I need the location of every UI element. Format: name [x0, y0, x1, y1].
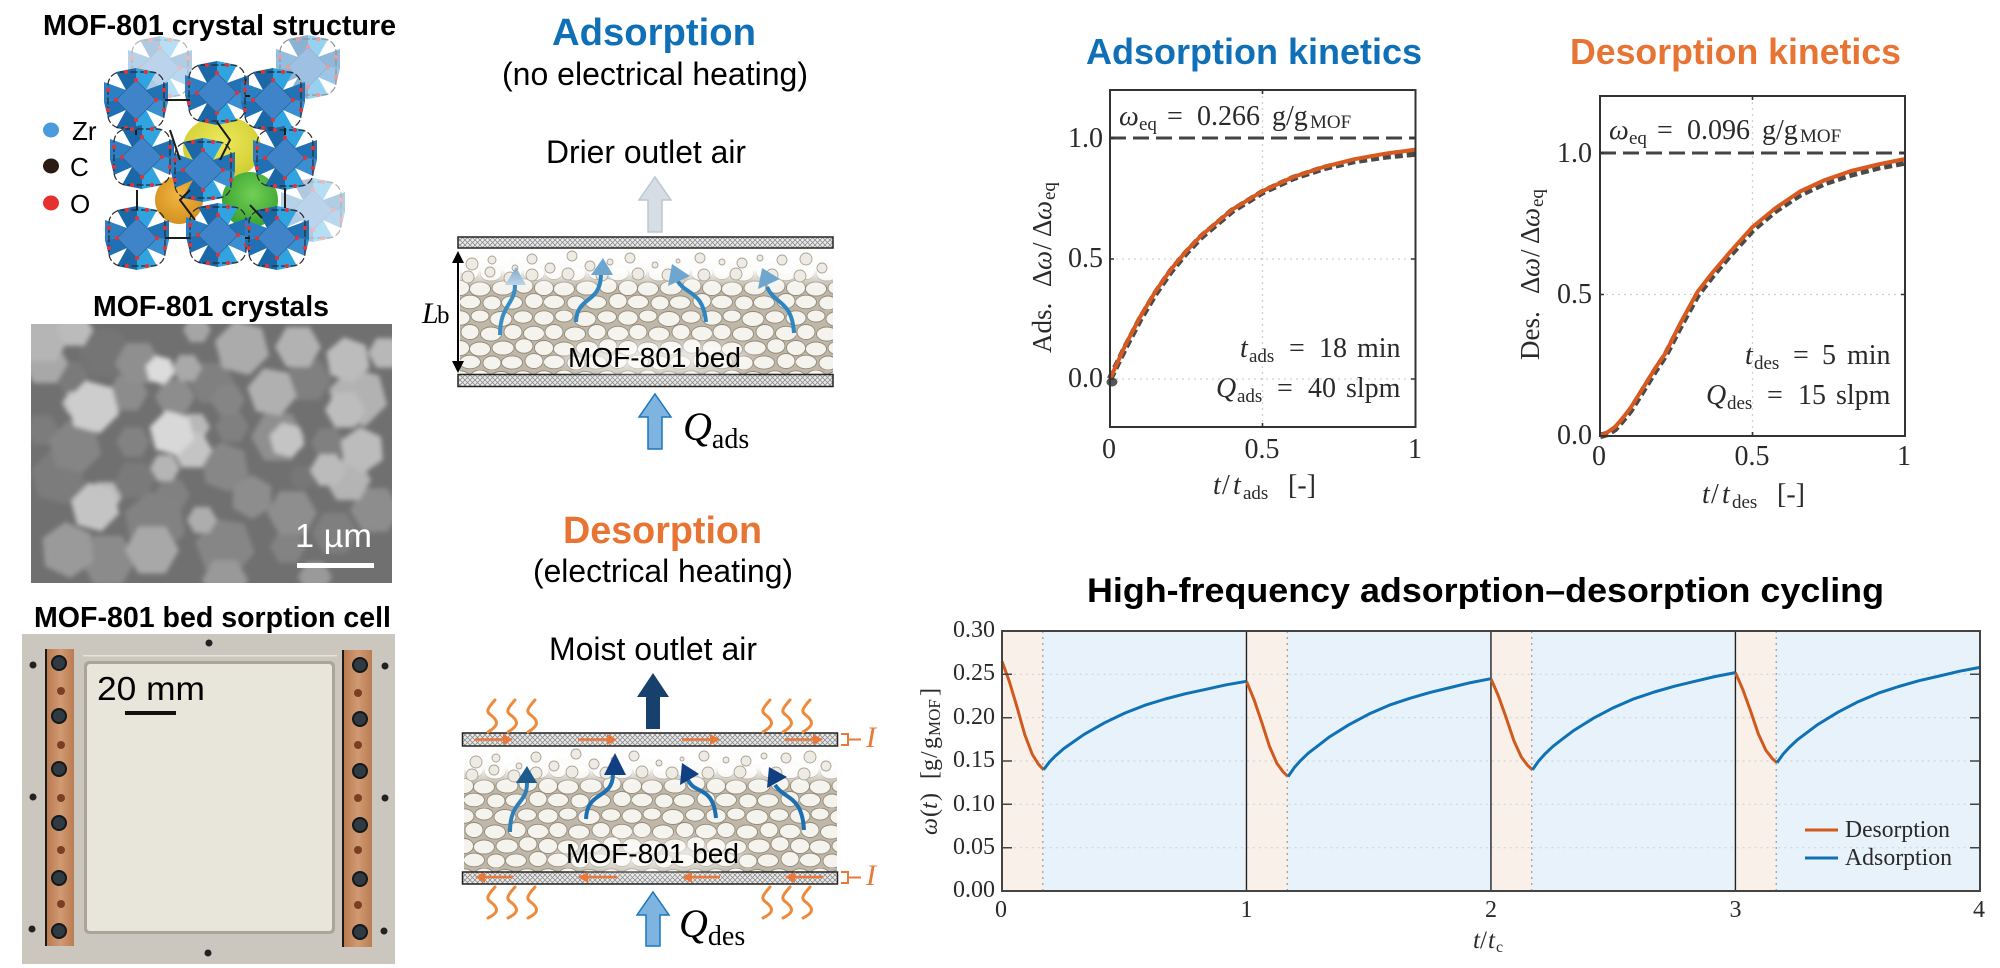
heading: Desorption kinetics: Desorption kinetics [1570, 31, 1901, 72]
annotation: omega eq: eq [1139, 114, 1157, 135]
annotation: t_des: des [1754, 353, 1779, 374]
y axis label: [ [917, 771, 943, 779]
y axis label: Des. [1515, 311, 1545, 360]
x tick labels [995, 897, 1985, 923]
annotation: t_ads: min [1357, 333, 1401, 364]
current label bottom [841, 859, 878, 892]
x tick labels: 0 [1102, 434, 1116, 465]
heading: MOF-801 bed sorption cell: MOF-801 bed sorption cell [34, 602, 391, 634]
label: Q_des: des [708, 921, 745, 952]
flow arrow 2 [576, 258, 613, 322]
MOF bed particles [460, 249, 833, 374]
annotation: omega eq: 0.096 [1687, 115, 1750, 146]
y tick labels [953, 617, 995, 903]
y axis label: eq [1527, 189, 1548, 207]
y axis label: Δ [1515, 277, 1545, 294]
flow arrow 2 [586, 753, 626, 819]
label: Moist outlet air: Moist outlet air [549, 631, 757, 667]
curve: desorption [1002, 661, 1777, 777]
label: Q_des: Q [679, 901, 708, 946]
chart: adsorption kinetics [1027, 90, 1422, 504]
scale bar [125, 711, 176, 715]
y tick labels: 0.15 [953, 747, 995, 773]
x axis label: t [1213, 470, 1222, 501]
arrow: moist air out [637, 673, 669, 729]
annotation: Q_des: des [1727, 393, 1752, 414]
y axis label: ω [917, 818, 943, 835]
annotation: omega eq: = [1167, 101, 1183, 132]
annotation: omega eq: MOF [1310, 112, 1351, 133]
current arrows bottom [475, 872, 823, 883]
annotation: omega eq: 0.266 [1197, 101, 1260, 132]
legend: atom colours: Zr [72, 116, 97, 146]
annotation: omega eq: eq [1629, 128, 1647, 149]
y axis label: Δ [1027, 220, 1057, 237]
x tick labels: 1 [1240, 897, 1252, 923]
arrow: inlet flow Q_des [637, 892, 669, 946]
y axis label: ω [1027, 201, 1057, 220]
heading: Desorption: Desorption [563, 510, 762, 552]
photo: bed sorption cell [22, 634, 395, 964]
y axis label: ] [917, 688, 943, 696]
x tick labels: 0 [1592, 441, 1606, 472]
y axis label: / [917, 751, 943, 758]
x tick labels [1102, 434, 1422, 465]
x axis label: t [1722, 479, 1731, 510]
flow arrow 3 [680, 763, 716, 818]
y tick labels: 0.20 [953, 704, 995, 730]
top mesh plate [462, 733, 838, 746]
y axis label: ω [1515, 258, 1545, 277]
legend: atom colours: O [70, 189, 90, 219]
x axis label: ads [1243, 483, 1268, 504]
annotation: Q_ads: Q [1216, 373, 1236, 404]
heat squiggles bottom [488, 887, 812, 918]
current label top: I [865, 721, 878, 754]
annotation: t_ads: = [1289, 333, 1305, 364]
legend: atom colours [43, 116, 97, 219]
chart: cycling [917, 617, 1985, 956]
flow arrow 3 [668, 264, 706, 322]
x axis label: t [1473, 927, 1481, 954]
annotation: t_ads: t [1240, 333, 1249, 364]
annotation: Q_ads: slpm [1346, 373, 1401, 404]
annotation: Q_des: slpm [1836, 380, 1891, 411]
heading: MOF-801 crystals: MOF-801 crystals [93, 291, 329, 323]
subheading: no electrical heating: (no electrical heating) [502, 56, 808, 92]
annotation: t_ads: 18 [1319, 333, 1347, 364]
x axis label: c [1496, 939, 1503, 956]
annotation: t_des: = [1793, 340, 1809, 371]
annotation: Q_ads: ads [1237, 386, 1262, 407]
label: L_b: L [421, 297, 439, 330]
annotation: t_des: min [1847, 340, 1891, 371]
heading: Adsorption kinetics: Adsorption kinetics [1086, 31, 1422, 72]
curve: reference dashed [1600, 162, 1905, 436]
label: MOF-801 bed: MOF-801 bed [566, 838, 739, 869]
y tick labels: 1.0 [1557, 138, 1592, 169]
annotation: t_ads: ads [1249, 346, 1274, 367]
copper electrode left [45, 649, 74, 946]
bottom mesh plate [462, 872, 838, 884]
x tick labels: 0.5 [1734, 441, 1770, 472]
y axis label: Ads. [1027, 303, 1057, 353]
annotation: t_des: 5 [1822, 340, 1836, 371]
x axis label: [-] [1288, 470, 1316, 501]
x axis label: / [1222, 470, 1230, 501]
y axis label: ) [917, 793, 943, 801]
scale label: 20 mm: 20 mm [97, 670, 205, 707]
x axis label: t [1488, 927, 1496, 954]
y tick labels: 0.25 [953, 660, 995, 686]
curve: measured orange [1600, 159, 1905, 436]
panel: adsorption bed diagram [421, 237, 833, 386]
annotation: omega eq: MOF [1800, 126, 1841, 147]
y tick labels: 0.30 [953, 617, 995, 643]
annotation: omega eq: ω [1119, 101, 1139, 132]
y tick labels: 0.0 [1557, 420, 1592, 451]
chart: desorption kinetics [1515, 96, 1911, 513]
shaded adsorption background [1002, 631, 1980, 891]
SEM micrograph [14, 313, 402, 600]
y axis label: Δ [1515, 227, 1545, 244]
annotation: omega eq: g/g [1762, 115, 1798, 146]
annotation: omega eq: g/g [1272, 101, 1308, 132]
annotation: Q_ads: = [1277, 373, 1293, 404]
heading: Adsorption: Adsorption [552, 12, 756, 54]
y tick labels: 1.0 [1068, 123, 1103, 154]
scale label: 1 µm: 1 µm [295, 517, 372, 554]
crystal structure illustration [104, 35, 345, 270]
current label top [841, 721, 878, 754]
x axis label: t [1233, 470, 1242, 501]
panel: desorption bed diagram [462, 700, 878, 918]
y axis label: eq [1039, 182, 1060, 200]
current arrows top [475, 734, 823, 745]
annotation: Q_des: 15 [1798, 380, 1826, 411]
flow arrow 1 [500, 267, 526, 335]
x axis label: t [1702, 479, 1711, 510]
plot area with bands and curves [1002, 631, 1980, 891]
y axis label: Δ [1027, 270, 1057, 287]
y axis label: / [1027, 242, 1057, 250]
flow arrow 4 [767, 767, 804, 830]
x tick labels: 4 [1973, 897, 1985, 923]
legend [1805, 817, 1952, 871]
arrow: inlet flow Q_ads [639, 394, 671, 449]
subheading: electrical heating: (electrical heating) [533, 553, 793, 589]
annotation: Q_ads: 40 [1308, 373, 1336, 404]
arrow: drier air out [639, 177, 671, 232]
y tick labels: 0.5 [1557, 279, 1592, 310]
y axis label: ω [1027, 251, 1057, 270]
x tick labels: 0 [995, 897, 1007, 923]
y axis label: ω [1515, 208, 1545, 227]
label: Q_ads: ads [712, 424, 749, 455]
x tick labels: 1 [1408, 434, 1422, 465]
legend: Adsorption [1845, 845, 1952, 871]
y tick labels [1068, 123, 1103, 394]
label: Drier outlet air: Drier outlet air [546, 134, 746, 170]
legend: atom colours: C [70, 152, 89, 182]
y tick labels: 0.0 [1068, 363, 1103, 394]
y axis label: ( [917, 809, 943, 817]
plot frame [1600, 96, 1905, 436]
y axis label: g [917, 737, 943, 749]
label: MOF-801 bed: MOF-801 bed [568, 342, 741, 373]
top mesh plate [458, 237, 833, 248]
annotation: Q_des: Q [1706, 380, 1726, 411]
annotation: omega eq: ω [1609, 115, 1629, 146]
shaded desorption bands [1002, 631, 1776, 891]
x axis label: / [1480, 927, 1487, 954]
flow arrow 1 [510, 766, 537, 832]
copper electrode right [342, 650, 372, 947]
x tick labels [1592, 441, 1911, 472]
y tick labels: 0.05 [953, 834, 995, 860]
x axis label: [-] [1777, 479, 1805, 510]
y tick labels: 0.00 [953, 877, 995, 903]
curve: measured orange [1110, 150, 1416, 379]
y tick labels: 0.5 [1068, 243, 1103, 274]
curve: adsorption [1044, 667, 1980, 777]
y axis label: MOF [925, 699, 944, 736]
curve: reference dashed [1110, 154, 1416, 379]
x axis label: / [1711, 479, 1719, 510]
title: MOF-801 crystal structure: MOF-801 crystal structure [43, 10, 396, 42]
x axis label: des [1732, 492, 1757, 513]
x tick labels: 3 [1730, 897, 1742, 923]
plot frame [1110, 90, 1416, 427]
y axis label: / [1515, 249, 1545, 257]
x tick labels: 2 [1485, 897, 1497, 923]
legend: Desorption [1845, 817, 1950, 843]
y axis label: g [917, 759, 943, 771]
heat squiggles top [488, 700, 812, 732]
y tick labels [1557, 138, 1592, 451]
annotation: omega eq: = [1657, 115, 1673, 146]
scale bar [297, 563, 374, 568]
MOF bed particles [464, 747, 837, 872]
flow arrow 4 [758, 268, 794, 333]
current label bottom: I [865, 859, 878, 892]
y axis label: t [917, 801, 943, 809]
x tick labels: 1 [1897, 441, 1911, 472]
y tick labels: 0.10 [953, 791, 995, 817]
label: L_b: b [437, 302, 450, 329]
label: Q_ads: Q [683, 404, 712, 449]
annotation: t_des: t [1745, 340, 1754, 371]
heading: high-frequency cycling: High-frequency adsorption–desorption cycling [1087, 572, 1884, 610]
dimension arrow [457, 254, 459, 370]
plot frame [1002, 631, 1980, 891]
annotation: Q_des: = [1767, 380, 1783, 411]
x tick labels: 0.5 [1244, 434, 1280, 465]
bottom mesh plate [458, 374, 833, 386]
